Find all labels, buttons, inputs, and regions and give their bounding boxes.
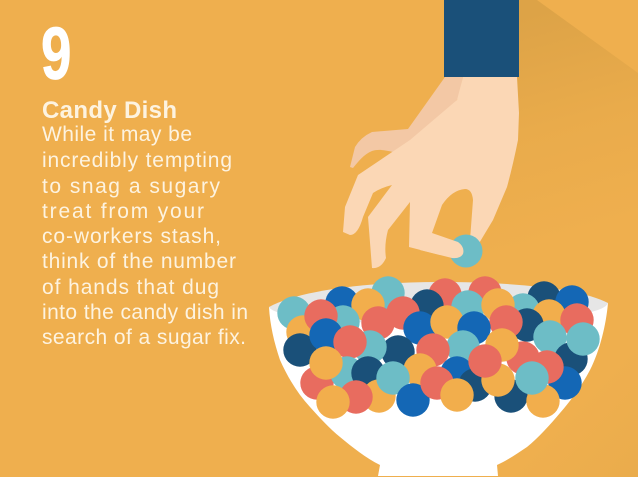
body text: of hands that dug: [42, 276, 219, 299]
sleeve cuff: [444, 0, 519, 77]
body text: incredibly tempting: [42, 149, 232, 172]
number nine: 9: [41, 12, 71, 95]
body text: think of the number: [42, 250, 236, 273]
body text: While it may be: [42, 123, 192, 146]
icon: hand reaching for candy: [343, 77, 519, 268]
body text: to snag a sugary: [42, 175, 220, 198]
held candy: [450, 234, 482, 268]
body text: [42, 123, 248, 349]
heading: Candy Dish: [42, 97, 177, 124]
pinching fingertip: [420, 233, 463, 258]
back finger: [350, 77, 463, 170]
bowl shadow: [500, 345, 638, 477]
candies in bowl: [277, 276, 600, 419]
body text: treat from your: [42, 200, 204, 223]
body text: co-workers stash,: [42, 225, 221, 248]
body text: search of a sugar fix.: [42, 326, 246, 349]
cuff shadow: [480, 0, 638, 300]
palm and fingers: [343, 77, 519, 268]
body text: into the candy dish in: [42, 301, 248, 324]
bowl: [269, 282, 608, 476]
bowl rim interior: [269, 282, 608, 324]
bowl body: [269, 303, 608, 476]
